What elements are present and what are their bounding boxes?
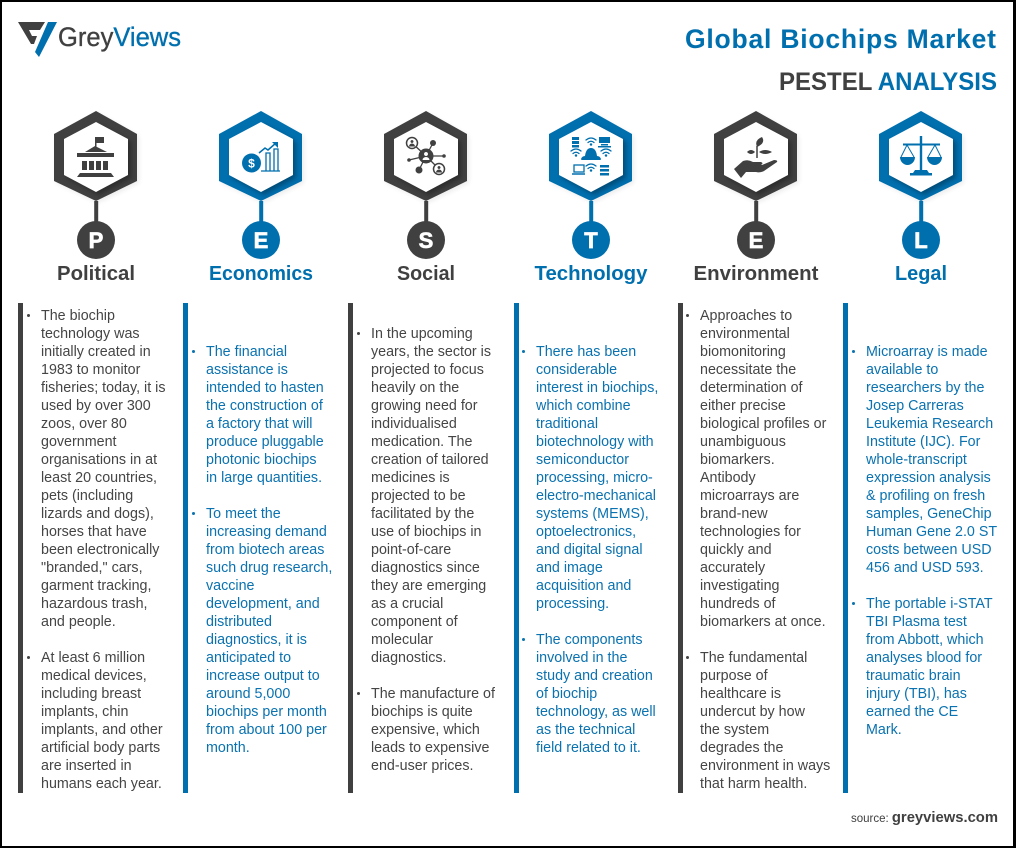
bar: social <box>348 303 353 793</box>
panel: technology text: as the technical <box>536 722 635 738</box>
panel: environment text <box>686 308 830 792</box>
panel: social text: medicines is <box>371 470 450 486</box>
panel: legal text: Institute (IJC). For <box>866 434 980 450</box>
logo: GreyViews <box>58 22 181 52</box>
panel: technology text: optoelectronics, <box>536 524 636 540</box>
panel: political text <box>27 308 165 792</box>
panel: technology text: and image <box>536 560 603 576</box>
panel: political text: implants, chin <box>41 704 128 720</box>
panel: legal text: Human Gene 2.0 ST <box>866 524 997 540</box>
panel: social text <box>357 326 495 774</box>
panel: economics text: distributed <box>206 614 272 630</box>
legal header <box>879 111 964 285</box>
source credit: source: greyviews.com <box>851 810 998 826</box>
panel: economics text: intended to hasten <box>206 380 324 396</box>
panel: economics text: increasing demand <box>206 524 327 540</box>
political header <box>54 111 139 285</box>
panel: social text: expensive, which <box>371 722 480 738</box>
panel: political text: technology was <box>41 326 140 342</box>
panel: political text: implants, and other <box>41 722 163 738</box>
social header <box>384 111 469 285</box>
label: Legal: Legal <box>895 263 947 285</box>
panel: social text: they are emerging <box>371 578 486 594</box>
panel: environment text: healthcare is <box>700 686 781 702</box>
panel: legal text: 456 and USD 593. <box>866 560 984 576</box>
letter S: S <box>419 228 433 253</box>
panel: environment text: biomarkers at once. <box>700 614 826 630</box>
panel: legal text <box>852 344 997 738</box>
panel: social text: end-user prices. <box>371 758 474 774</box>
panel: environment text: necessitate the <box>700 362 796 378</box>
panel: social text: creation of tailored <box>371 452 489 468</box>
panel: legal text: injury (TBI), has <box>866 686 967 702</box>
panel: environment text: that harm health. <box>700 776 807 792</box>
panel: economics text: a factory that will <box>206 416 312 432</box>
panel: social text: leads to expensive <box>371 740 489 756</box>
panel: technology text: biotechnology with <box>536 434 654 450</box>
panel: environment text: the system <box>700 722 769 738</box>
panel: legal text: earned the CE <box>866 704 958 720</box>
panel: social text: years, the sector is <box>371 344 491 360</box>
panel: technology text: involved in the <box>536 650 627 666</box>
panel: environment text: undercut by how <box>700 704 805 720</box>
panel: technology text: electro-mechanical <box>536 488 656 504</box>
panel: environment text: quickly and <box>700 542 772 558</box>
letter E: E <box>749 228 763 253</box>
panel: economics text: produce pluggable <box>206 434 324 450</box>
panel: economics text: from biotech areas <box>206 542 324 558</box>
icon: connected cloud devices <box>571 137 611 176</box>
panel: technology text: processing. <box>536 596 609 612</box>
panel: political text: initially created in <box>41 344 151 360</box>
panel: legal text: expression analysis <box>866 470 991 486</box>
panel: political text: medical devices, <box>41 668 147 684</box>
panel: environment text: determination of <box>700 380 803 396</box>
panel: political text: The biochip <box>41 308 115 324</box>
panel: environment text: hundreds of <box>700 596 776 612</box>
panel: environment text: biological profiles or <box>700 416 826 432</box>
panel: environment text: unambiguous <box>700 434 786 450</box>
panel: political text: fisheries; today, it is <box>41 380 165 396</box>
panel: economics text: such drug research, <box>206 560 332 576</box>
label: Economics: Economics <box>209 263 313 285</box>
panel: legal text: whole-transcript <box>866 452 967 468</box>
panel: technology text: semiconductor <box>536 452 629 468</box>
bar: political <box>18 303 23 793</box>
panel: political text: hazardous trash, <box>41 596 148 612</box>
panel: legal text: researchers by the <box>866 380 984 396</box>
bar: environment <box>678 303 683 793</box>
panel: environment text: environment in ways <box>700 758 830 774</box>
subtitle: PESTEL ANALYSIS <box>779 68 997 96</box>
panel: social text: molecular <box>371 632 433 648</box>
panel: political text: been electronically <box>41 542 159 558</box>
panel: social text: growing need for <box>371 398 478 414</box>
panel: social text: projected to be <box>371 488 466 504</box>
panel: environment text: biomonitoring <box>700 344 786 360</box>
panel: legal text: available to <box>866 362 938 378</box>
panel: technology text: acquisition and <box>536 578 631 594</box>
icon: government building <box>77 137 114 177</box>
panel: technology text: interest in biochips, <box>536 380 658 396</box>
panel: environment text: technologies for <box>700 524 801 540</box>
panel: political text: least 20 countries, <box>41 470 157 486</box>
panel: technology text: of biochip <box>536 686 597 702</box>
panel: economics text: in large quantities. <box>206 470 322 486</box>
bar: legal <box>843 303 848 793</box>
panel: environment text: degrades the <box>700 740 783 756</box>
panel: social text: point-of-care <box>371 542 451 558</box>
panel: political text: organisations in at <box>41 452 157 468</box>
panel: economics text: around 5,000 <box>206 686 290 702</box>
panel: social text: individualised <box>371 416 457 432</box>
panel: political text: horses that have <box>41 524 147 540</box>
panel: environment text: biomarkers. <box>700 452 775 468</box>
icon: scales of justice <box>900 136 942 176</box>
icon: dollar and growth chart <box>242 142 280 172</box>
panel: economics text: the construction of <box>206 398 323 414</box>
panel: social text: diagnostics. <box>371 650 446 666</box>
panel: economics text: diagnostics, it is <box>206 632 307 648</box>
panel: legal text: Leukemia Research <box>866 416 993 432</box>
panel: economics text: development, and <box>206 596 320 612</box>
panel: economics text: vaccine <box>206 578 254 594</box>
panel: legal text: & profiling on fresh <box>866 488 985 504</box>
panel: political text: used by over 300 <box>41 398 151 414</box>
icon: dollar and growth chart: $ <box>248 156 255 170</box>
panel: technology text: and digital signal <box>536 542 643 558</box>
panel: economics text: month. <box>206 740 250 756</box>
panel: social text: diagnostics since <box>371 560 480 576</box>
letter P: P <box>89 228 103 253</box>
panel: environment text: Antibody <box>700 470 756 486</box>
panel: technology text: study and creation <box>536 668 653 684</box>
panel: political text: artificial body parts <box>41 740 160 756</box>
panel: technology text: which combine <box>536 398 631 414</box>
panel: environment text: either precise <box>700 398 786 414</box>
panel: social text: use of biochips in <box>371 524 481 540</box>
panel: political text: government <box>41 434 116 450</box>
bar: technology <box>514 303 519 793</box>
letter L: L <box>914 228 928 253</box>
label: Technology: Technology <box>534 263 648 285</box>
panel: environment text: brand-new <box>700 506 768 522</box>
panel: environment text: The fundamental <box>700 650 807 666</box>
panel: political text: 1983 to monitor <box>41 362 140 378</box>
title: Global Biochips Market <box>685 24 996 54</box>
panel: technology text <box>522 344 658 756</box>
panel: technology text: The components <box>536 632 642 648</box>
panel: economics text: assistance is <box>206 362 288 378</box>
panel: political text: humans each year. <box>41 776 162 792</box>
panel: technology text: technology, as well <box>536 704 656 720</box>
icon: people network <box>406 138 446 174</box>
economics header <box>209 111 313 285</box>
panel: economics text: photonic biochips <box>206 452 316 468</box>
panel: legal text: Josep Carreras <box>866 398 964 414</box>
label: Political: Political <box>57 263 135 285</box>
panel: economics text: To meet the <box>206 506 281 522</box>
panel: economics text <box>192 344 332 756</box>
icon: hand holding plant <box>734 137 777 178</box>
label: Social: Social <box>397 263 455 285</box>
panel: social text: as a crucial <box>371 596 443 612</box>
panel: social text: component of <box>371 614 458 630</box>
panel: legal text: The portable i-STAT <box>866 596 993 612</box>
panel: legal text: costs between USD <box>866 542 992 558</box>
panel: technology text: traditional <box>536 416 598 432</box>
panel: environment text: purpose of <box>700 668 768 684</box>
letter T: T <box>584 228 598 253</box>
panel: social text: facilitated by the <box>371 506 474 522</box>
panel: environment text: microarrays are <box>700 488 799 504</box>
label: Environment: Environment <box>694 263 819 285</box>
panel: legal text: samples, GeneChip <box>866 506 992 522</box>
panel: economics text: anticipated to <box>206 650 291 666</box>
panel: legal text: Mark. <box>866 722 902 738</box>
panel: economics text: The financial <box>206 344 287 360</box>
panel: political text: garment tracking, <box>41 578 151 594</box>
panel: political text: lizards and dogs), <box>41 506 154 522</box>
panel: economics text: biochips per month <box>206 704 327 720</box>
letter E: E <box>254 228 268 253</box>
panel: legal text: traumatic brain <box>866 668 961 684</box>
logo <box>18 22 181 57</box>
panel: social text: projected to focus <box>371 362 484 378</box>
panel: environment text: environmental <box>700 326 790 342</box>
panel: social text: In the upcoming <box>371 326 473 342</box>
panel: technology text: field related to it. <box>536 740 641 756</box>
panel: political text: "branded," cars, <box>41 560 143 576</box>
panel: environment text: Approaches to <box>700 308 792 324</box>
panel: legal text: from Abbott, which <box>866 632 984 648</box>
panel: environment text: investigating <box>700 578 779 594</box>
panel: social text: biochips is quite <box>371 704 473 720</box>
panel: economics text: increase output to <box>206 668 320 684</box>
environment header <box>694 111 819 285</box>
panel: political text: pets (including <box>41 488 133 504</box>
panel: social text: heavily on the <box>371 380 459 396</box>
panel: political text: are inserted in <box>41 758 132 774</box>
panel: political text: including breast <box>41 686 141 702</box>
bar: economics <box>183 303 188 793</box>
panel: technology text: There has been <box>536 344 636 360</box>
panel: political text: zoos, over 80 <box>41 416 127 432</box>
technology header <box>534 111 648 285</box>
panel: political text: At least 6 million <box>41 650 145 666</box>
panel: environment text: accurately <box>700 560 765 576</box>
panel: social text: medication. The <box>371 434 472 450</box>
panel: economics text: from about 100 per <box>206 722 327 738</box>
panel: legal text: analyses blood for <box>866 650 982 666</box>
panel: legal text: TBI Plasma test <box>866 614 967 630</box>
panel: social text: The manufacture of <box>371 686 495 702</box>
panel: political text: and people. <box>41 614 116 630</box>
panel: technology text: systems (MEMS), <box>536 506 649 522</box>
panel: technology text: considerable <box>536 362 617 378</box>
panel: legal text: Microarray is made <box>866 344 988 360</box>
panel: technology text: processing, micro- <box>536 470 653 486</box>
